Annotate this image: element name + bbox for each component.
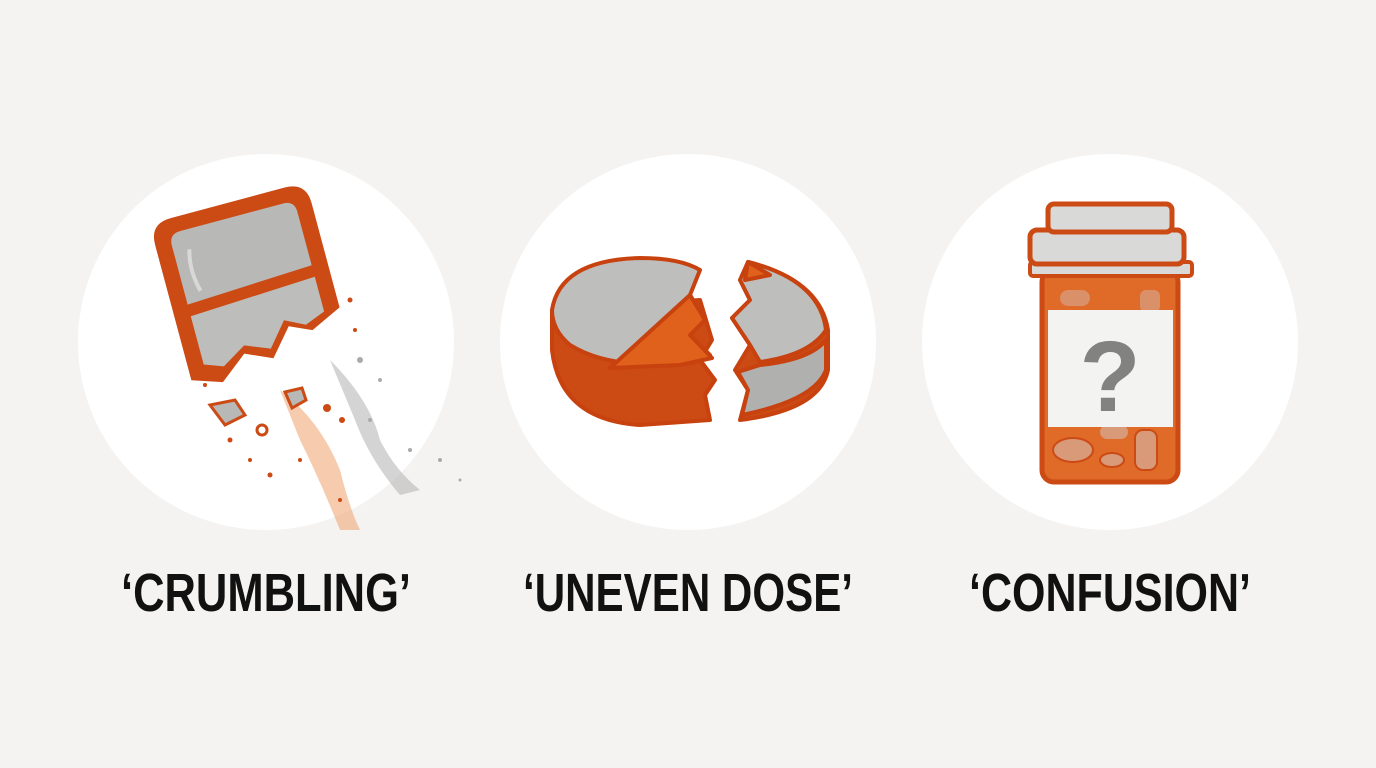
- label: uneven dose: ‘UNEVEN DOSE’: [523, 563, 853, 623]
- panel: uneven dose: [500, 154, 876, 530]
- circle background: crumbling: [78, 154, 454, 530]
- label: confusion: ‘CONFUSION’: [969, 563, 1251, 623]
- panel: crumbling: [78, 154, 462, 530]
- label: crumbling: ‘CRUMBLING’: [121, 563, 411, 623]
- circle background: confusion: [922, 154, 1298, 530]
- icon: pill bottle with question mark: [1030, 204, 1192, 482]
- circle background: uneven dose: [500, 154, 876, 530]
- icon: crumbling pill: [149, 182, 462, 530]
- icon: pill bottle with question mark: ?: [1079, 321, 1141, 433]
- icon: broken tablet: [552, 258, 828, 425]
- panel: confusion: [922, 154, 1298, 530]
